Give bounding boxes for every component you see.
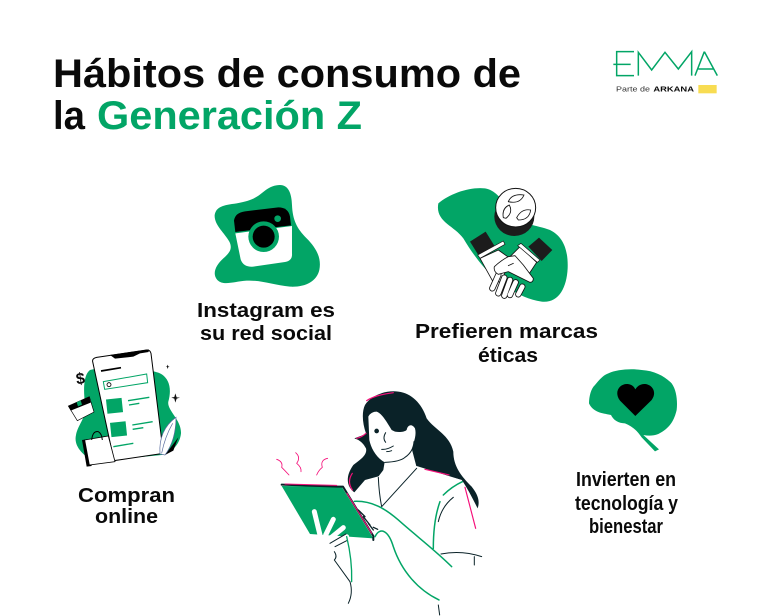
label: Compran online: online [95,505,158,528]
leaf [165,437,178,455]
heart [617,384,654,416]
green outline sleeves [354,501,452,567]
search bar [103,374,148,389]
icon: brain with heart [589,369,677,451]
label: Instagram: Instagram es [197,299,335,322]
logo: EMMA Parte de ARKANA: ARKANA [653,85,695,94]
illustration: woman with tablet [277,391,482,615]
top hand [494,256,533,282]
green blob [438,188,568,302]
pink accents [349,393,476,528]
calendar [68,397,94,421]
neck and shirt [354,448,478,520]
label: tecnología y bienestar: Invierten en [576,468,676,491]
label: Instagram [197,299,335,345]
title: Hábitos de consumo de [53,52,521,96]
sleeves [480,250,510,282]
camera body [235,226,292,267]
icon: Instagram camera on green blob [215,185,320,287]
hand fingers on tablet [314,512,347,543]
hands and cuffs [470,232,552,296]
hair [348,391,479,508]
label: tecnología y bienestar: tecnología y [575,492,679,515]
label: Compran online [78,484,175,528]
black cuffs [470,232,494,255]
shopping bag [82,439,92,467]
label: marcas éticas: Prefieren marcas [415,320,598,343]
collar [378,468,417,507]
logo: EMMA Parte de ARKANA: Parte de [616,85,650,94]
label: tecnología y bienestar [575,468,679,538]
label: Instagram: su red social [200,322,332,345]
sparkles [171,393,180,403]
green blob [215,185,320,287]
tablet [282,486,373,538]
title [53,52,521,138]
phone [93,350,163,461]
products [106,398,123,414]
seal [494,197,534,236]
label: marcas éticas: éticas [478,344,538,367]
label: tecnología y bienestar: bienestar [589,515,663,538]
label: marcas éticas [415,320,598,367]
dollar sign: $ [75,370,86,388]
fingers [492,275,522,296]
logo: EMMA Parte de ARKANA [613,52,717,94]
title: la [53,94,86,138]
title: Generación Z [97,94,362,138]
icon: handshake with leaf seal [438,188,568,302]
green blob [76,368,181,462]
face [368,412,416,463]
label: Compran online: Compran [78,484,175,507]
icon: phone shopping [68,349,181,467]
